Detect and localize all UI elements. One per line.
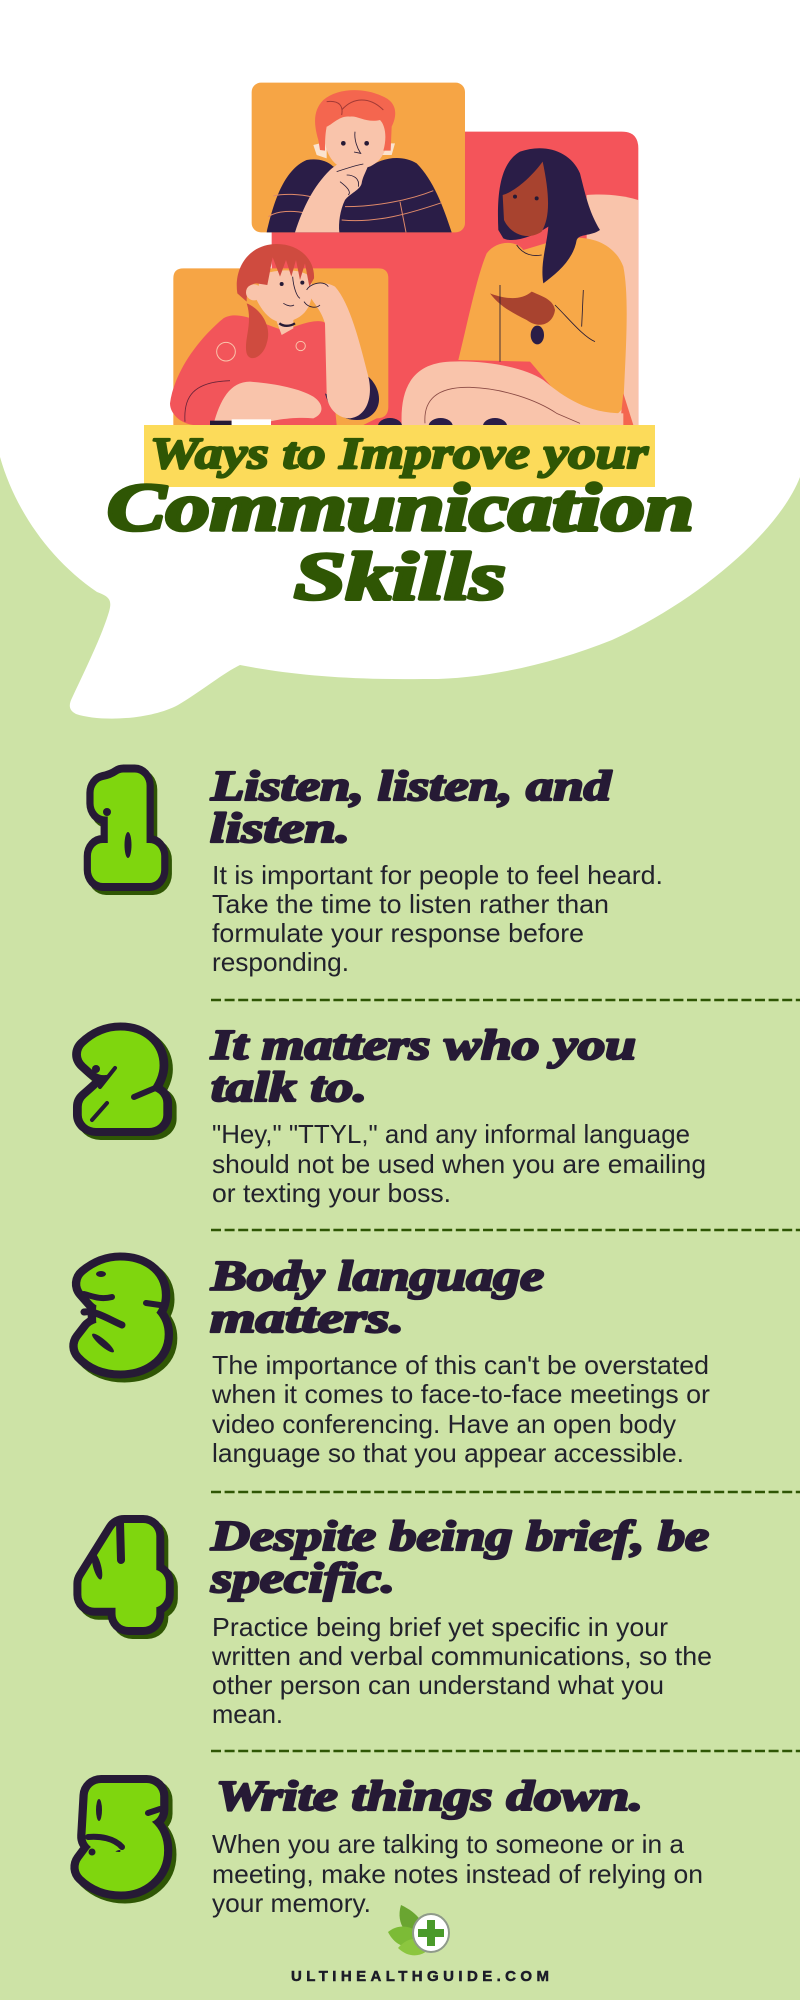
body 3: video conferencing. Have an open body: [212, 1409, 676, 1439]
main title: Skills: [294, 538, 506, 614]
body 2: should not be used when you are emailing: [212, 1149, 706, 1179]
number 5: 5: [89, 1747, 157, 1910]
body 4: [211, 1612, 712, 1729]
item 1: [94, 735, 663, 977]
number 1: 1: [94, 735, 156, 905]
item 3: [84, 1227, 710, 1468]
heading 4: specific.: [210, 1556, 395, 1602]
seated woman: [402, 148, 633, 425]
body 4: mean.: [212, 1699, 283, 1729]
heading 4: [210, 1514, 709, 1602]
feet and hands at banner edge: [210, 418, 507, 434]
heading 2: [210, 1023, 636, 1111]
website: ULTIHEALTHGUIDE.COM: [291, 1968, 549, 1985]
girl: [170, 244, 379, 425]
heading 1: listen.: [210, 806, 350, 852]
speech bubble: [0, 0, 800, 719]
heading 5: Write things down.: [216, 1774, 643, 1820]
body 3: The importance of this can't be overstated: [212, 1350, 709, 1380]
body 1: formulate your response before: [212, 918, 584, 948]
number 3: 3: [93, 1231, 162, 1393]
number 5: 5: [89, 1747, 157, 1910]
body 1: Take the time to listen rather than: [212, 889, 609, 919]
number 4: 4: [96, 1494, 160, 1650]
body 5: [212, 1829, 703, 1918]
body 3: when it comes to face-to-face meetings or: [211, 1379, 710, 1409]
item 5: [88, 1747, 703, 1918]
heading 1: Listen, listen, and: [210, 764, 612, 810]
chair: [587, 195, 638, 425]
logo icon: [388, 1905, 449, 1955]
number 2: 2: [92, 1004, 154, 1144]
body 5: When you are talking to someone or in a: [212, 1829, 685, 1859]
orange panel top: [252, 83, 465, 232]
item 4: [90, 1490, 712, 1729]
heading 2: talk to.: [211, 1065, 367, 1111]
heading 3: [210, 1254, 544, 1342]
heading 3: Body language: [210, 1254, 544, 1300]
heading 4: Despite being brief, be: [210, 1514, 709, 1560]
subtitle: Ways to Improve your: [150, 429, 649, 478]
body 2: [212, 1119, 706, 1208]
illustration: three people on video call: [170, 83, 638, 434]
body 4: Practice being brief yet specific in your: [212, 1612, 668, 1642]
body 1: [212, 860, 663, 977]
heading 2: It matters who you: [210, 1023, 636, 1069]
number 1: 1: [94, 735, 156, 905]
body 5: your memory.: [212, 1888, 371, 1918]
body 4: other person can understand what you: [212, 1670, 664, 1700]
number 2: 2: [92, 1004, 154, 1144]
body 5: meeting, make notes instead of relying on: [212, 1859, 703, 1889]
number 4: 4: [92, 1490, 156, 1646]
main title: [107, 469, 694, 614]
body 2: "Hey," "TTYL," and any informal language: [212, 1119, 690, 1149]
body 4: written and verbal communications, so the: [211, 1641, 712, 1671]
number 4: 4: [92, 1490, 156, 1646]
body 3: [211, 1350, 710, 1468]
number 1: 1: [98, 739, 160, 909]
body 1: responding.: [212, 947, 349, 977]
title banner: [144, 425, 655, 487]
number 2: 2: [96, 1008, 159, 1148]
heading 1: [210, 764, 612, 852]
item 2: [92, 1004, 706, 1208]
main title: Communication: [107, 469, 694, 545]
number 3: 3: [88, 1227, 158, 1389]
number 3: 3: [88, 1227, 158, 1389]
body 1: It is important for people to feel heard.: [212, 860, 663, 890]
body 2: or texting your boss.: [212, 1178, 451, 1208]
man: [267, 90, 452, 232]
orange panel lower: [173, 268, 388, 425]
number 5: 5: [93, 1751, 161, 1914]
body 3: language so that you appear accessible.: [212, 1438, 684, 1468]
red panel: [272, 132, 638, 425]
heading 3: matters.: [210, 1296, 404, 1342]
